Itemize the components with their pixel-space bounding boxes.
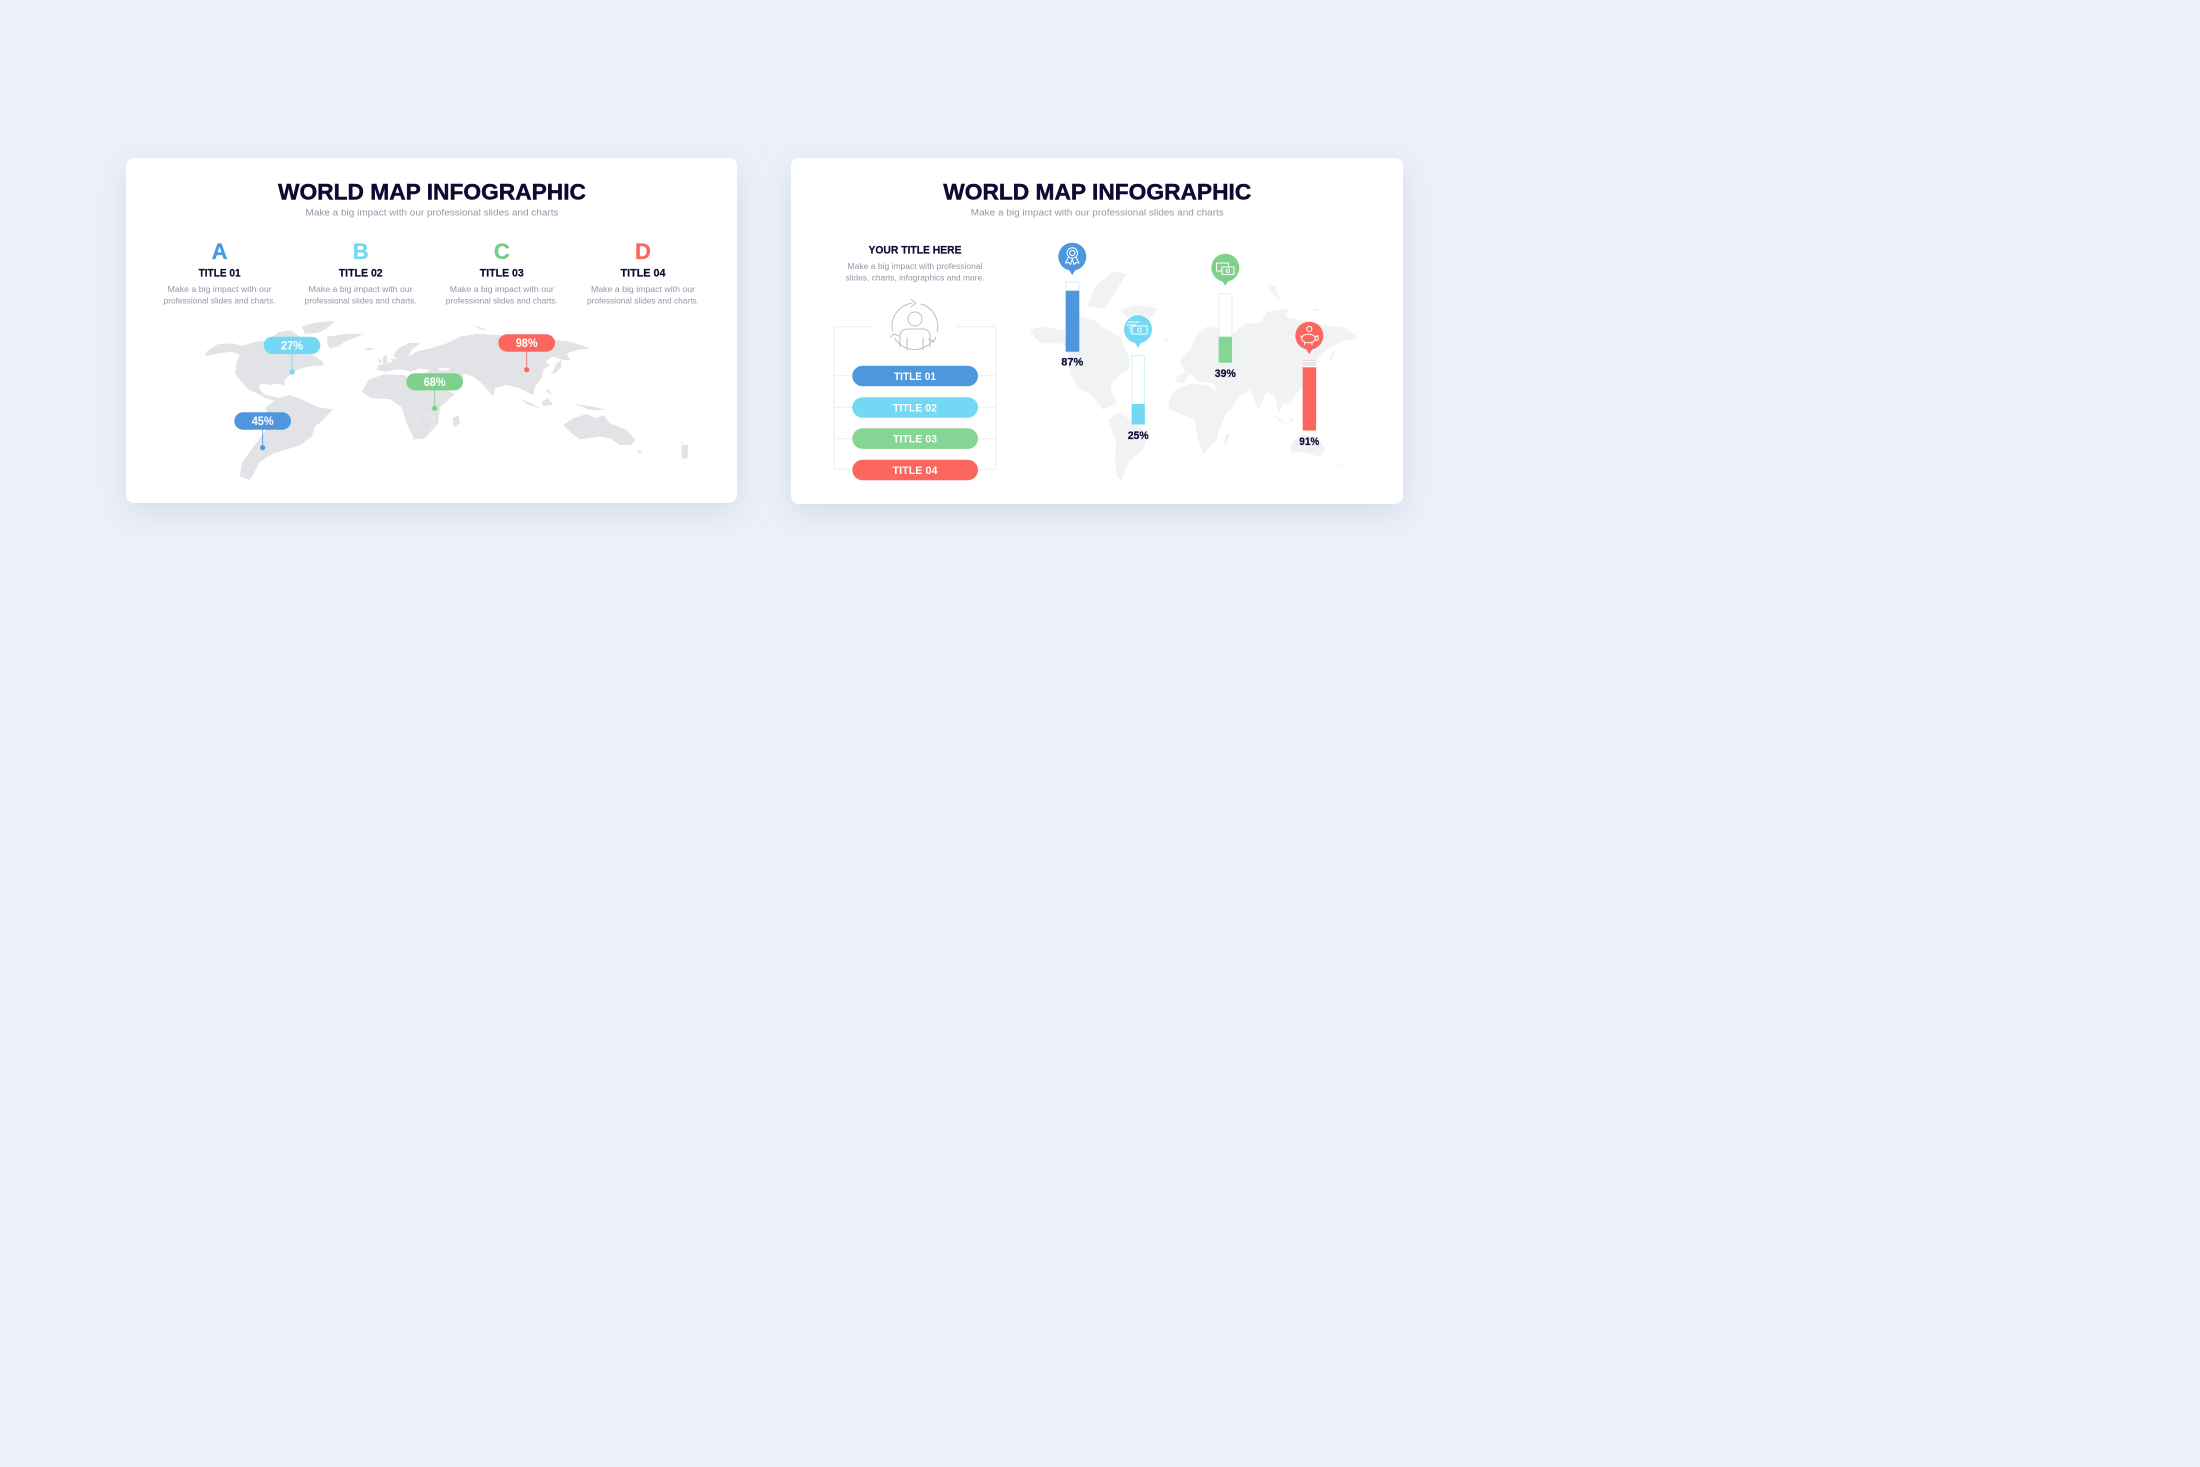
bracket connector lines: [834, 327, 996, 469]
column D: Make a big impact with our: [591, 285, 695, 294]
pin: 68%: [406, 373, 463, 411]
column C: Make a big impact with our: [450, 285, 554, 294]
button: title 01: TITLE 01: [894, 371, 936, 383]
description text: slides, charts, infographics and more.: [846, 274, 984, 282]
column C: C: [494, 239, 510, 264]
column D: [587, 239, 699, 306]
column A: TITLE 01: [199, 268, 241, 280]
bar: 87% with medal pin: 87%: [1061, 356, 1083, 368]
pin: 68%: 68%: [424, 377, 446, 389]
column B: TITLE 02: [339, 268, 383, 280]
bar: 91% with piggy bank pin: [1295, 322, 1323, 448]
button: title 03: [852, 428, 978, 449]
icon: flying money: [1127, 322, 1147, 334]
column B: B: [353, 239, 369, 264]
column B: Make a big impact with our: [309, 285, 413, 294]
column A: A: [212, 239, 228, 264]
column B: professional slides and charts.: [305, 296, 417, 306]
bar: 39% with bills pin: [1211, 254, 1239, 380]
button: title 02: TITLE 02: [893, 402, 937, 414]
column D: D: [635, 239, 651, 264]
column C: TITLE 03: [480, 268, 524, 280]
column A: Make a big impact with our: [168, 285, 272, 294]
bar: 39% with bills pin: 39%: [1215, 368, 1236, 380]
icon: person with circular arrows: [890, 300, 938, 350]
bar: 87% with medal pin: [1058, 243, 1086, 368]
title: WORLD MAP INFOGRAPHIC: [278, 180, 586, 204]
pin: 98%: 98%: [516, 338, 538, 350]
column B: [305, 239, 417, 306]
column A: professional slides and charts.: [164, 296, 276, 306]
description text: [846, 262, 984, 282]
bar: 25% with banknote pin: 25%: [1128, 430, 1149, 442]
pin: 27%: [264, 337, 320, 375]
button: title 04: [852, 460, 978, 480]
column C: [446, 239, 558, 306]
title: WORLD MAP INFOGRAPHIC: [943, 180, 1251, 204]
subtitle: Make a big impact with our professional slides and charts: [306, 208, 559, 219]
pin: 98%: [498, 334, 555, 372]
column C: professional slides and charts.: [446, 296, 558, 306]
bar: 25% with banknote pin: [1124, 315, 1152, 442]
pin: 45%: [234, 412, 291, 450]
icon: medal: [1066, 248, 1079, 264]
column A: [164, 239, 276, 306]
world map, right slide: [1029, 272, 1358, 480]
button: title 04: TITLE 04: [892, 465, 938, 477]
button: title 03: TITLE 03: [893, 434, 937, 446]
icon: piggy bank: [1300, 326, 1318, 344]
subtitle: Make a big impact with our professional slides and charts: [971, 208, 1224, 219]
button: title 01: [852, 366, 978, 386]
column D: TITLE 04: [620, 268, 666, 280]
pin: 45%: 45%: [252, 416, 274, 428]
column D: professional slides and charts.: [587, 296, 699, 306]
panel: right slide, title list and map bar chart: [791, 158, 1403, 504]
pin: 27%: 27%: [281, 340, 303, 352]
bar: 91% with piggy bank pin: 91%: [1299, 436, 1319, 448]
icon: bills: [1216, 263, 1234, 274]
world map, left slide: [205, 321, 688, 480]
button: title 02: [852, 397, 978, 418]
description text: Make a big impact with professional: [848, 262, 983, 271]
panel: left slide, world map with percentage pins: [126, 158, 737, 503]
heading: your title here: YOUR TITLE HERE: [868, 245, 962, 257]
